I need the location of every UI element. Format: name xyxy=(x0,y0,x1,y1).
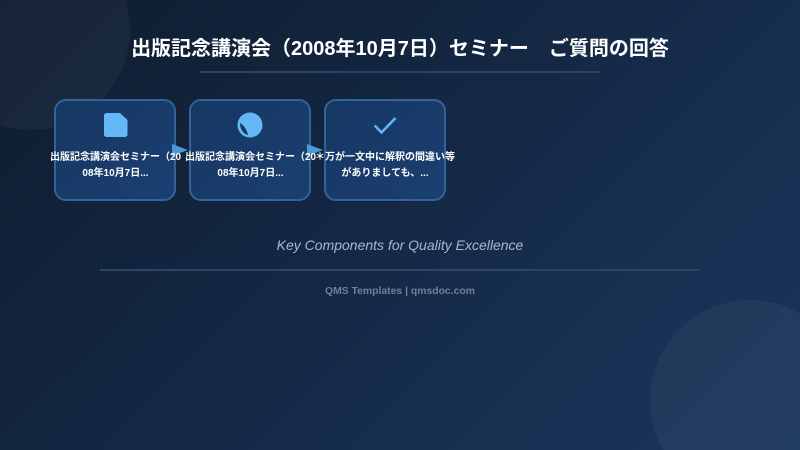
panel: card 3 xyxy=(324,99,446,201)
arrow: card 2 to card 3 xyxy=(307,144,323,156)
arrow: card 1 to card 2 xyxy=(172,144,188,156)
panel: card 2 xyxy=(189,99,311,201)
icon: document xyxy=(104,113,128,137)
card 2 text: 出版記念講演会セミナー（20 xyxy=(185,152,316,163)
icon: check mark xyxy=(374,117,396,134)
footer text: QMS Templates | qmsdoc.com xyxy=(325,286,475,297)
card 3 text xyxy=(315,150,455,179)
icon: globe with leaf xyxy=(238,112,262,138)
card 1 text: 出版記念講演会セミナー（20 xyxy=(50,152,181,163)
title underline xyxy=(200,71,600,73)
subtitle: Key Components for Quality Excellence xyxy=(277,237,523,253)
card 2 text xyxy=(185,151,316,179)
card 2 text: 08年10月7日... xyxy=(217,168,284,179)
panel: card 1 xyxy=(54,99,176,201)
footer divider xyxy=(100,269,700,271)
title: 出版記念講演会（2008年10月7日）セミナー ご質問の回答 xyxy=(131,38,669,60)
card 3 text: ＊万が一文中に解釈の間違い等 xyxy=(315,152,455,163)
card 1 text xyxy=(50,151,181,179)
card 1 text: 08年10月7日... xyxy=(82,168,149,179)
card 3 text: がありましても、... xyxy=(341,168,429,179)
decorative circle: top left xyxy=(0,0,130,130)
decorative circle: bottom right xyxy=(650,300,800,450)
